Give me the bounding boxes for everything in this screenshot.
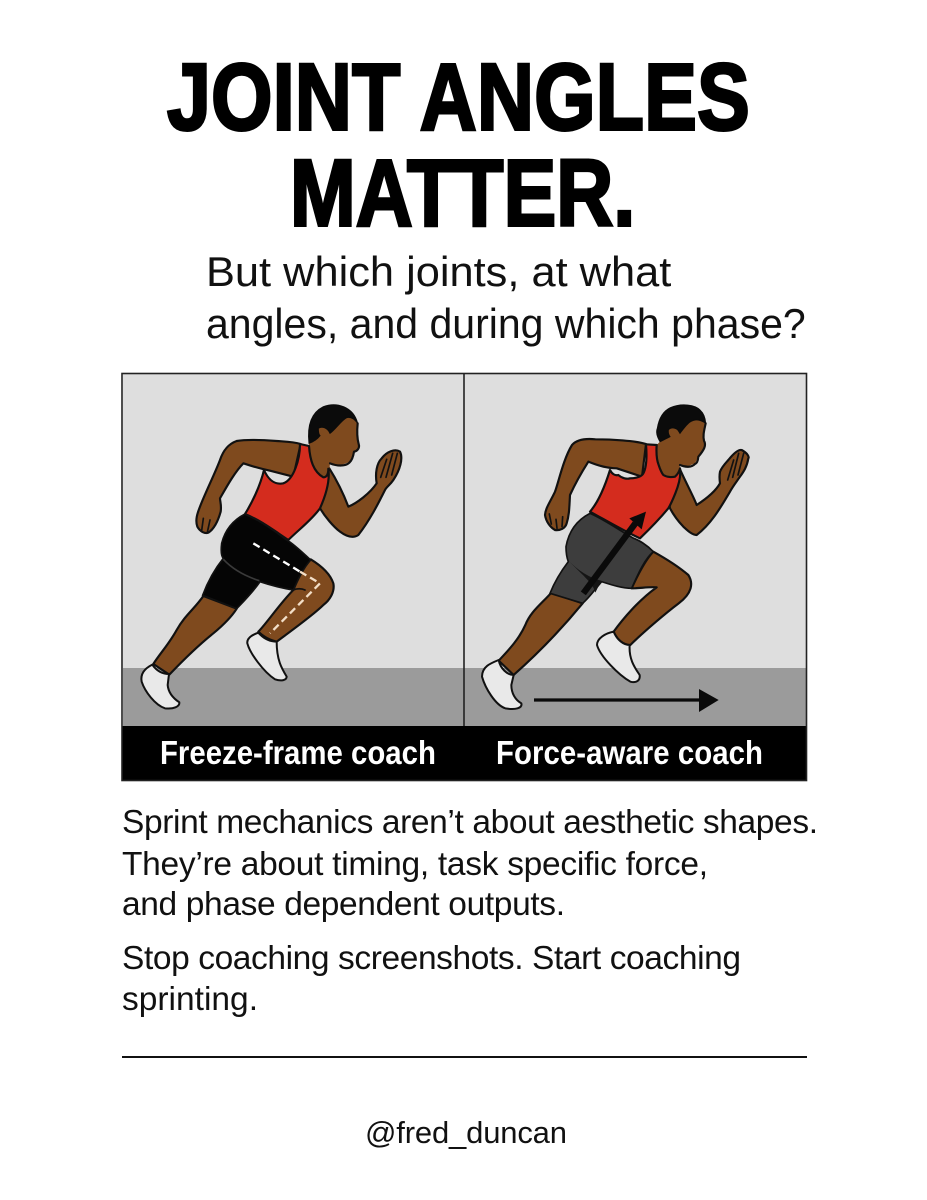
body text: They’re about timing, task specific force, xyxy=(122,846,708,883)
closing statement: sprinting. xyxy=(122,981,258,1018)
title: MATTER. xyxy=(290,141,635,246)
panel frame and divider xyxy=(122,374,806,780)
subtitle xyxy=(206,249,806,347)
closing statement: Stop coaching screenshots. Start coaching xyxy=(122,940,741,977)
runner with force arrows xyxy=(482,405,749,712)
caption: force-aware coach: Force-aware coach xyxy=(496,734,763,771)
panel: freeze-frame coach xyxy=(122,374,464,781)
title: JOINT ANGLES xyxy=(167,45,750,150)
subtitle: angles, and during which phase? xyxy=(206,300,806,347)
body text xyxy=(122,804,818,923)
body text: Sprint mechanics aren’t about aesthetic shapes. xyxy=(122,804,818,841)
body text: and phase dependent outputs. xyxy=(122,886,565,923)
runner with dashed joint lines xyxy=(141,405,401,709)
subtitle: But which joints, at what xyxy=(206,249,671,296)
author handle: @fred_duncan xyxy=(365,1115,567,1150)
caption: freeze-frame coach: Freeze-frame coach xyxy=(160,734,436,771)
closing statement xyxy=(122,940,741,1018)
panel: force-aware coach xyxy=(464,374,807,781)
title xyxy=(167,45,750,246)
